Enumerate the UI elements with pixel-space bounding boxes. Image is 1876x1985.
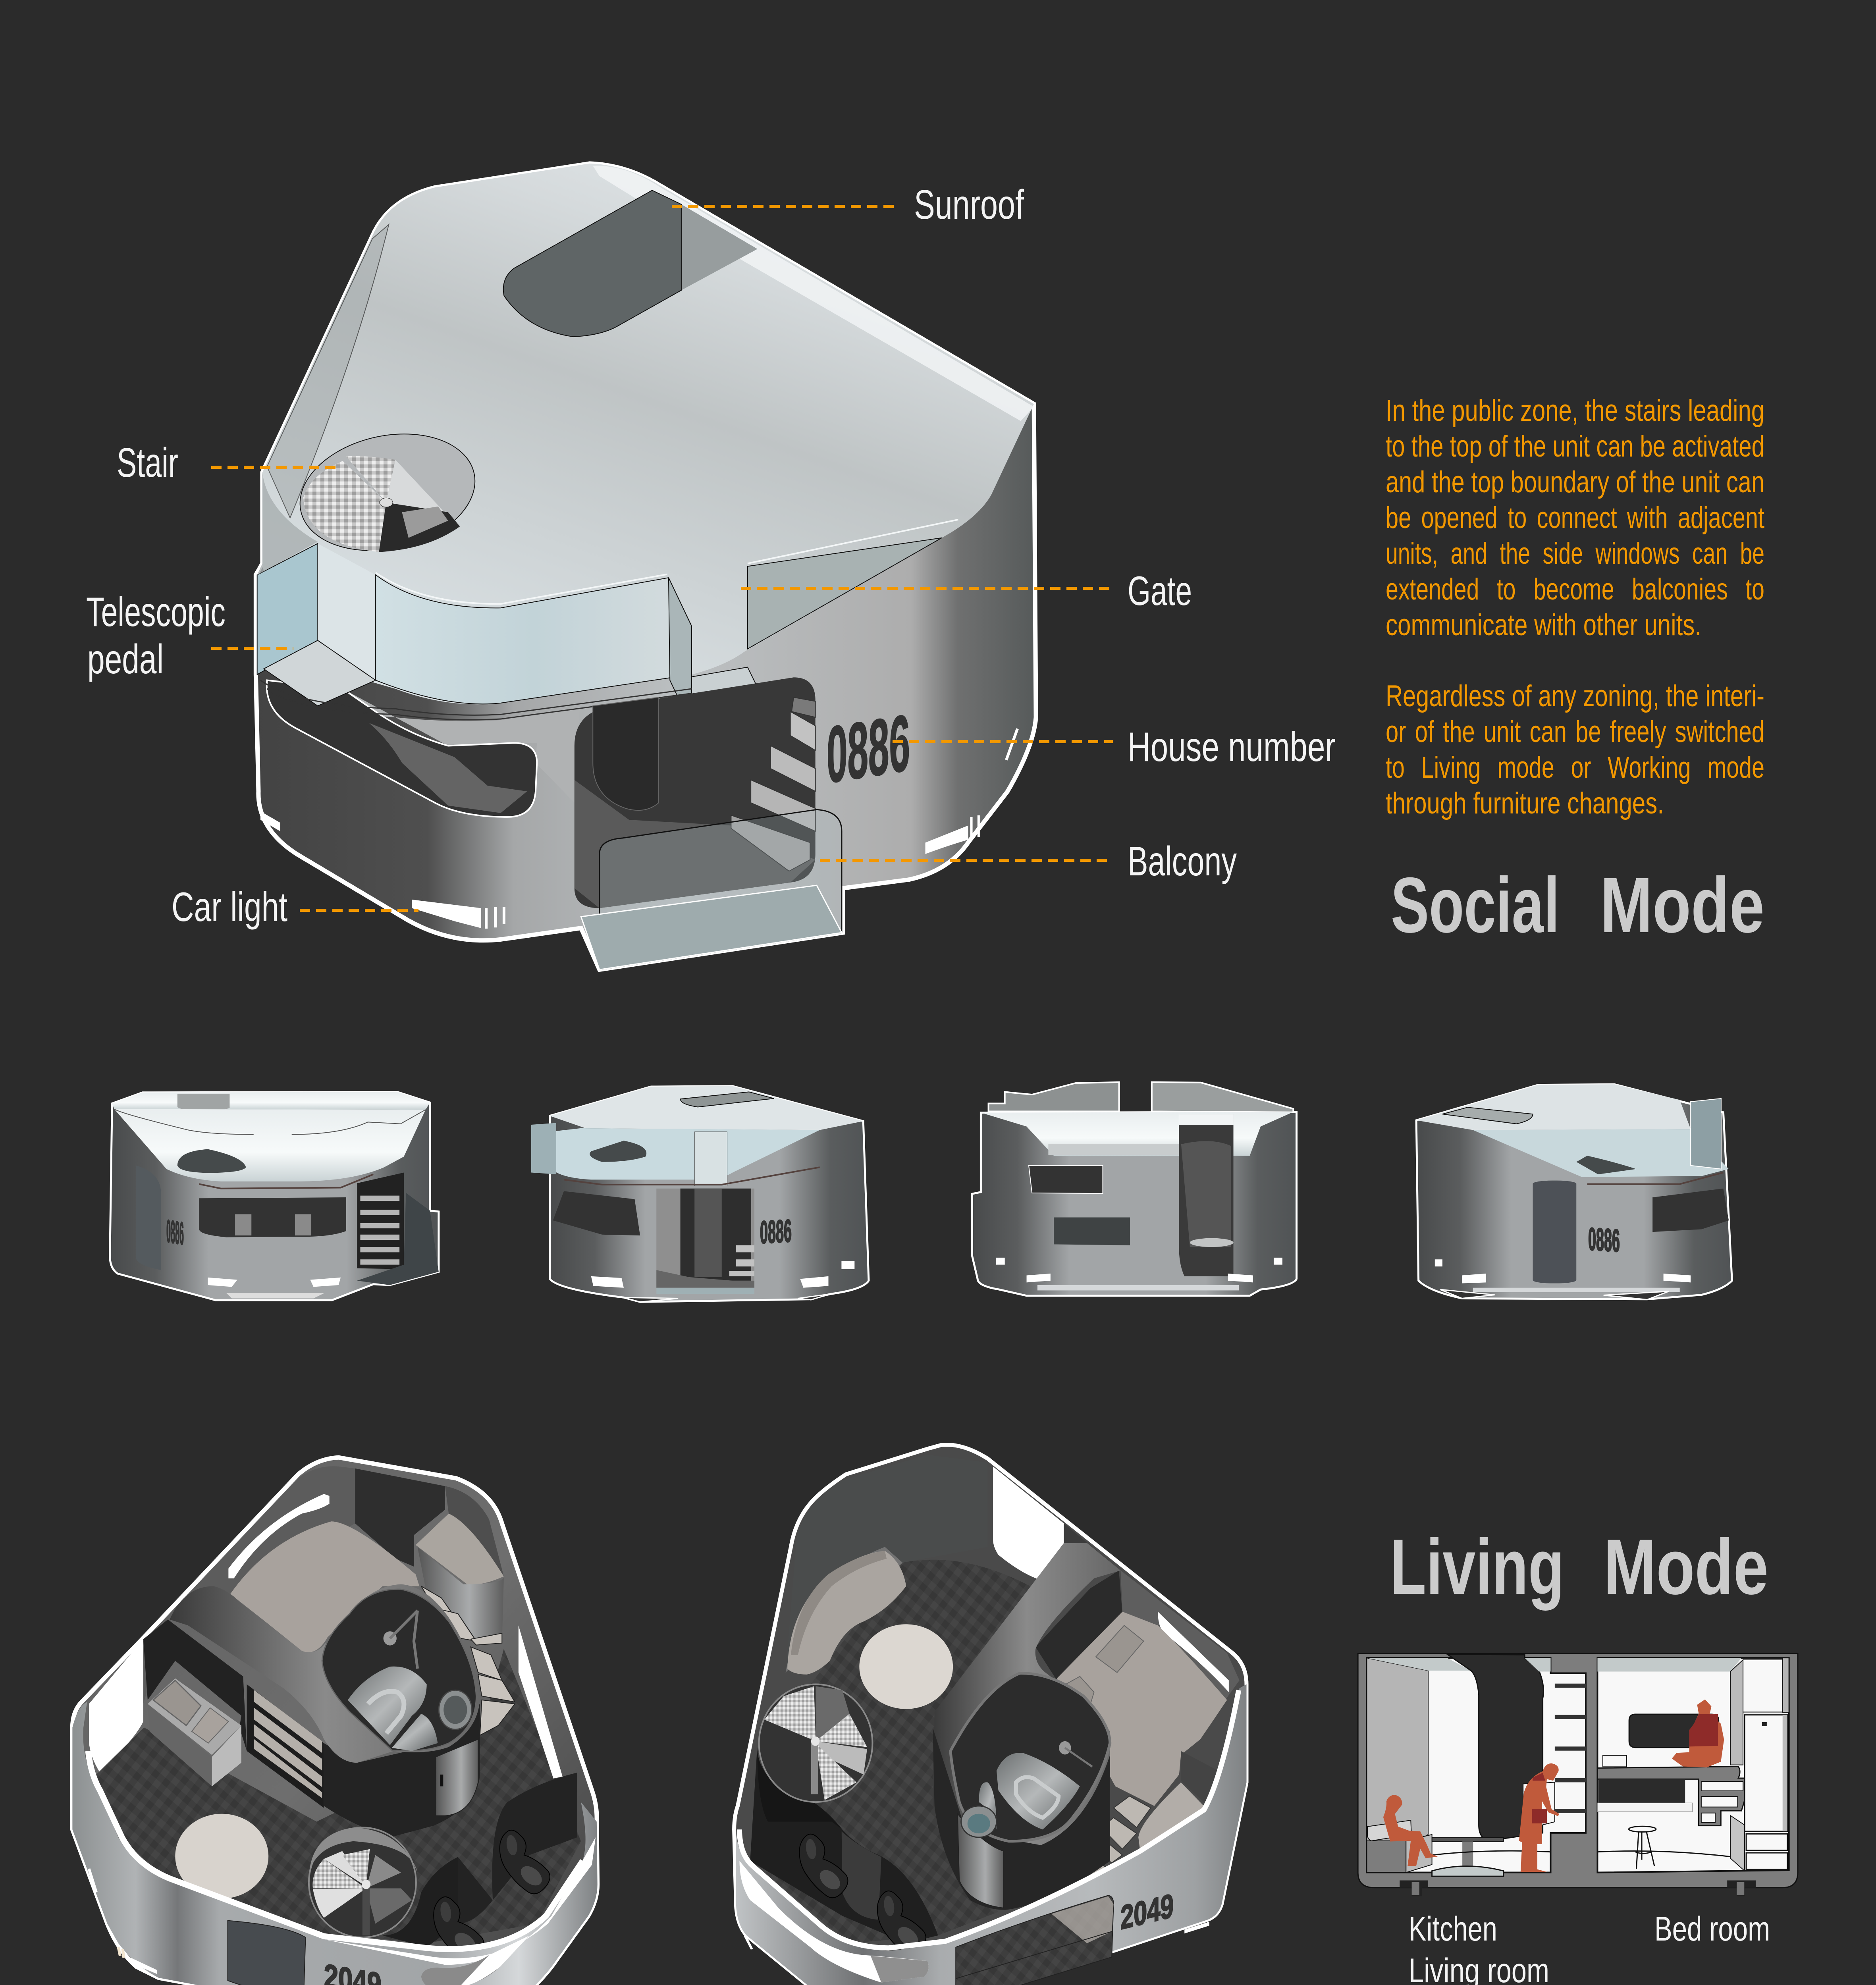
kitchen counter — [148, 1679, 241, 1786]
plan view: living mode, right — [734, 1445, 1247, 1985]
staircase — [421, 1586, 515, 1735]
view 3 lights — [996, 1258, 1282, 1282]
sofa — [1367, 1820, 1432, 1873]
view 1 seats — [235, 1214, 311, 1235]
kitchen niche — [143, 1619, 247, 1751]
right window — [1629, 1714, 1719, 1748]
view 2 doorway — [656, 1189, 754, 1288]
view 1 stair strip — [357, 1173, 404, 1269]
exterior view 1 — [110, 1092, 439, 1300]
wall window strip — [228, 1494, 330, 1578]
right floor line — [1597, 1851, 1730, 1857]
view 1 glass — [114, 1109, 426, 1181]
label: stair: Stair — [117, 440, 178, 486]
shell and floor — [72, 1457, 598, 1985]
trim lines — [260, 680, 692, 720]
heading: social mode: Social — [1391, 861, 1560, 949]
view 4 wheels — [1440, 1289, 1669, 1300]
right room — [1597, 1658, 1789, 1873]
left window — [267, 680, 537, 817]
heading: living mode: Living — [1390, 1523, 1564, 1611]
section: living mode — [1358, 1654, 1798, 1896]
callout line: car light — [300, 909, 418, 912]
view 1 glass rim — [114, 1109, 426, 1135]
window reflection — [369, 723, 527, 813]
exterior view 4 — [1416, 1084, 1732, 1300]
callout line: house number — [893, 740, 1113, 743]
shelves — [247, 1684, 324, 1808]
view 4 sunroof — [1442, 1107, 1533, 1124]
view 4 base highlight — [1473, 1288, 1680, 1292]
shell, floor and sofa — [734, 1445, 1247, 1985]
left side wall — [1367, 1658, 1428, 1873]
view 1 body — [110, 1092, 439, 1300]
label: bed room: Bed room — [1654, 1910, 1770, 1948]
interior stairs — [731, 698, 816, 871]
view 4 balustrade — [1691, 1098, 1721, 1169]
bathroom pod — [933, 1543, 1120, 1910]
vertical fin panel — [669, 578, 692, 726]
right ceiling — [1597, 1658, 1741, 1671]
view 3 slot top — [1179, 1114, 1234, 1125]
person standing at kitchen — [1519, 1763, 1560, 1872]
upper metal band — [267, 680, 580, 803]
view 2 body — [550, 1086, 869, 1302]
view 2 stair hole — [590, 1141, 646, 1162]
description text block: communicate with other units. — [1386, 608, 1701, 642]
label: sunroof: Sunroof — [914, 182, 1024, 228]
balcony glass — [581, 809, 842, 969]
front wall — [736, 1684, 1247, 1985]
view 1 balcony glass — [357, 1193, 439, 1285]
view 3 base highlight — [1037, 1285, 1239, 1290]
view 3 pole end — [1190, 1238, 1234, 1247]
view 2 gate strip — [694, 1132, 727, 1186]
round table — [175, 1814, 268, 1898]
kitchen outline — [1523, 1782, 1555, 1825]
view 2 window — [553, 1191, 640, 1235]
view 3 rear panels — [989, 1082, 1293, 1112]
wardrobe — [1730, 1658, 1789, 1869]
view 3 roof band — [981, 1112, 1293, 1156]
callout line: sunroof — [672, 205, 896, 208]
unit shell and metal body — [256, 164, 1036, 969]
text: 0886 — [1588, 1221, 1620, 1258]
glass top rim — [376, 572, 667, 604]
description text block: be opened to connect with adjacent — [1386, 501, 1764, 535]
exterior view 3 — [972, 1082, 1297, 1296]
ceiling right piece — [1525, 1658, 1551, 1671]
sill — [1597, 1803, 1693, 1812]
front wall — [72, 1702, 598, 1985]
view 2 wheels — [624, 1294, 831, 1302]
view 1 lights — [208, 1278, 341, 1287]
ceiling left — [1367, 1658, 1471, 1671]
bathroom pod — [170, 1584, 480, 1837]
view 3 window 1 — [1029, 1166, 1103, 1193]
text: 0886 — [760, 1213, 792, 1250]
view 2 lights — [591, 1261, 854, 1288]
spiral stair and seats — [750, 1684, 938, 1954]
view 1 base highlight — [226, 1293, 324, 1298]
floor curve — [1432, 1851, 1551, 1855]
plan view: living mode, left — [72, 1457, 598, 1985]
view 1 window — [199, 1197, 346, 1237]
stair opening in roof — [282, 415, 493, 569]
exterior view 2 — [531, 1086, 869, 1302]
front glass wall — [376, 575, 692, 704]
heading: living mode: Mode — [1604, 1523, 1768, 1611]
gate rim — [748, 520, 958, 563]
main axonometric unit: social mode — [256, 164, 1036, 969]
roof surface — [262, 164, 1034, 704]
view 4 body — [1416, 1084, 1732, 1299]
view 2 roof — [550, 1086, 863, 1130]
doorway — [575, 677, 816, 908]
labels: kitchen and living room: Kitchen — [1409, 1910, 1497, 1948]
car light left front — [412, 900, 504, 929]
low cabinet door — [1730, 1815, 1745, 1871]
front deck wall — [318, 543, 376, 680]
label: house number: House number — [1128, 724, 1336, 770]
staircase — [1066, 1796, 1151, 1890]
description text block: In the public zone, the stairs leading — [1386, 394, 1764, 428]
view 2 balcony fin — [531, 1123, 556, 1174]
description text block: to the top of the unit can be activated — [1386, 430, 1764, 463]
cabinet — [1138, 1751, 1218, 1851]
label: car light: Car light — [172, 884, 287, 930]
side marker — [1006, 728, 1018, 760]
label: gate: Gate — [1128, 568, 1192, 614]
round table — [859, 1624, 953, 1709]
description text block: to Living mode or Working mode — [1386, 751, 1764, 784]
telescopic pedal — [264, 640, 376, 706]
side cone glazing — [267, 224, 389, 518]
curved corner glazing — [257, 472, 318, 575]
label: balcony: Balcony — [1128, 838, 1237, 885]
loft slab and stepped drawers — [1597, 1767, 1746, 1826]
gate glazing — [748, 538, 942, 649]
bed and pillows — [1057, 1612, 1227, 1806]
callout line: gate — [741, 587, 1113, 590]
bed — [230, 1521, 419, 1652]
plan number 2049: 2049 — [1120, 1887, 1174, 1937]
view 1 trim — [199, 1174, 373, 1189]
stool — [1629, 1826, 1656, 1869]
view 3 lower roof shade — [1048, 1144, 1179, 1155]
view 3 body — [972, 1112, 1297, 1296]
view 4 stair hole — [1576, 1156, 1636, 1174]
car light right — [925, 815, 979, 854]
side car light — [260, 811, 280, 831]
table — [1432, 1838, 1504, 1876]
sunroof — [503, 190, 758, 337]
view 2 balcony base — [656, 1288, 754, 1294]
side window glazing — [956, 1895, 1114, 1985]
dark stair shaft — [1447, 1654, 1543, 1841]
view 4 trim — [1587, 1173, 1723, 1184]
view 3 slot glazing — [1179, 1114, 1234, 1276]
upper pedal — [672, 667, 769, 726]
description text block: extended to become balconies to — [1386, 572, 1764, 606]
wheels — [1400, 1880, 1756, 1896]
text: 0886 — [827, 698, 910, 800]
label: telescopic pedal: pedal — [87, 636, 164, 682]
pillow — [1603, 1756, 1627, 1767]
view 1 roof — [112, 1092, 430, 1110]
description text block: Regardless of any zoning, the interi- — [1386, 679, 1764, 713]
description text block: or of the unit can be freely switched — [1386, 715, 1764, 749]
lower window — [1598, 1779, 1685, 1803]
section shell — [1358, 1654, 1798, 1888]
label: telescopic pedal: Telescopic — [86, 589, 226, 635]
person seated on sofa — [1383, 1795, 1438, 1866]
left room — [1367, 1658, 1586, 1873]
callout line: stair — [211, 466, 339, 469]
view 4 door panel — [1533, 1181, 1576, 1284]
view 1 roof notch — [177, 1094, 229, 1112]
view 2 trim — [564, 1167, 820, 1185]
person sitting on loft bed — [1672, 1700, 1724, 1767]
text: 0886 — [166, 1213, 184, 1252]
left glass balustrade — [257, 543, 318, 675]
description text block: through furniture changes. — [1386, 786, 1664, 820]
description text block: and the top boundary of the unit can — [1386, 465, 1764, 499]
view 4 window — [1652, 1189, 1729, 1232]
heading: social mode: Mode — [1600, 861, 1764, 949]
view 4 lights — [1435, 1259, 1691, 1284]
spiral stair and seats — [309, 1773, 577, 1960]
view 4 roof — [1416, 1084, 1691, 1130]
roof crest highlight — [593, 166, 1034, 421]
callout line: telescopic pedal — [211, 647, 293, 650]
shelves — [1555, 1684, 1586, 1813]
view 3 spiral stair — [1181, 1141, 1231, 1247]
view 1 side panel — [136, 1166, 161, 1270]
view 1 stair hole — [177, 1149, 246, 1173]
view 2 sunroof — [681, 1092, 774, 1107]
view 2 glass — [550, 1128, 820, 1179]
view 4 glass — [1473, 1129, 1729, 1177]
callout line: balcony — [820, 859, 1113, 862]
view 3 window 2 — [1054, 1217, 1130, 1245]
